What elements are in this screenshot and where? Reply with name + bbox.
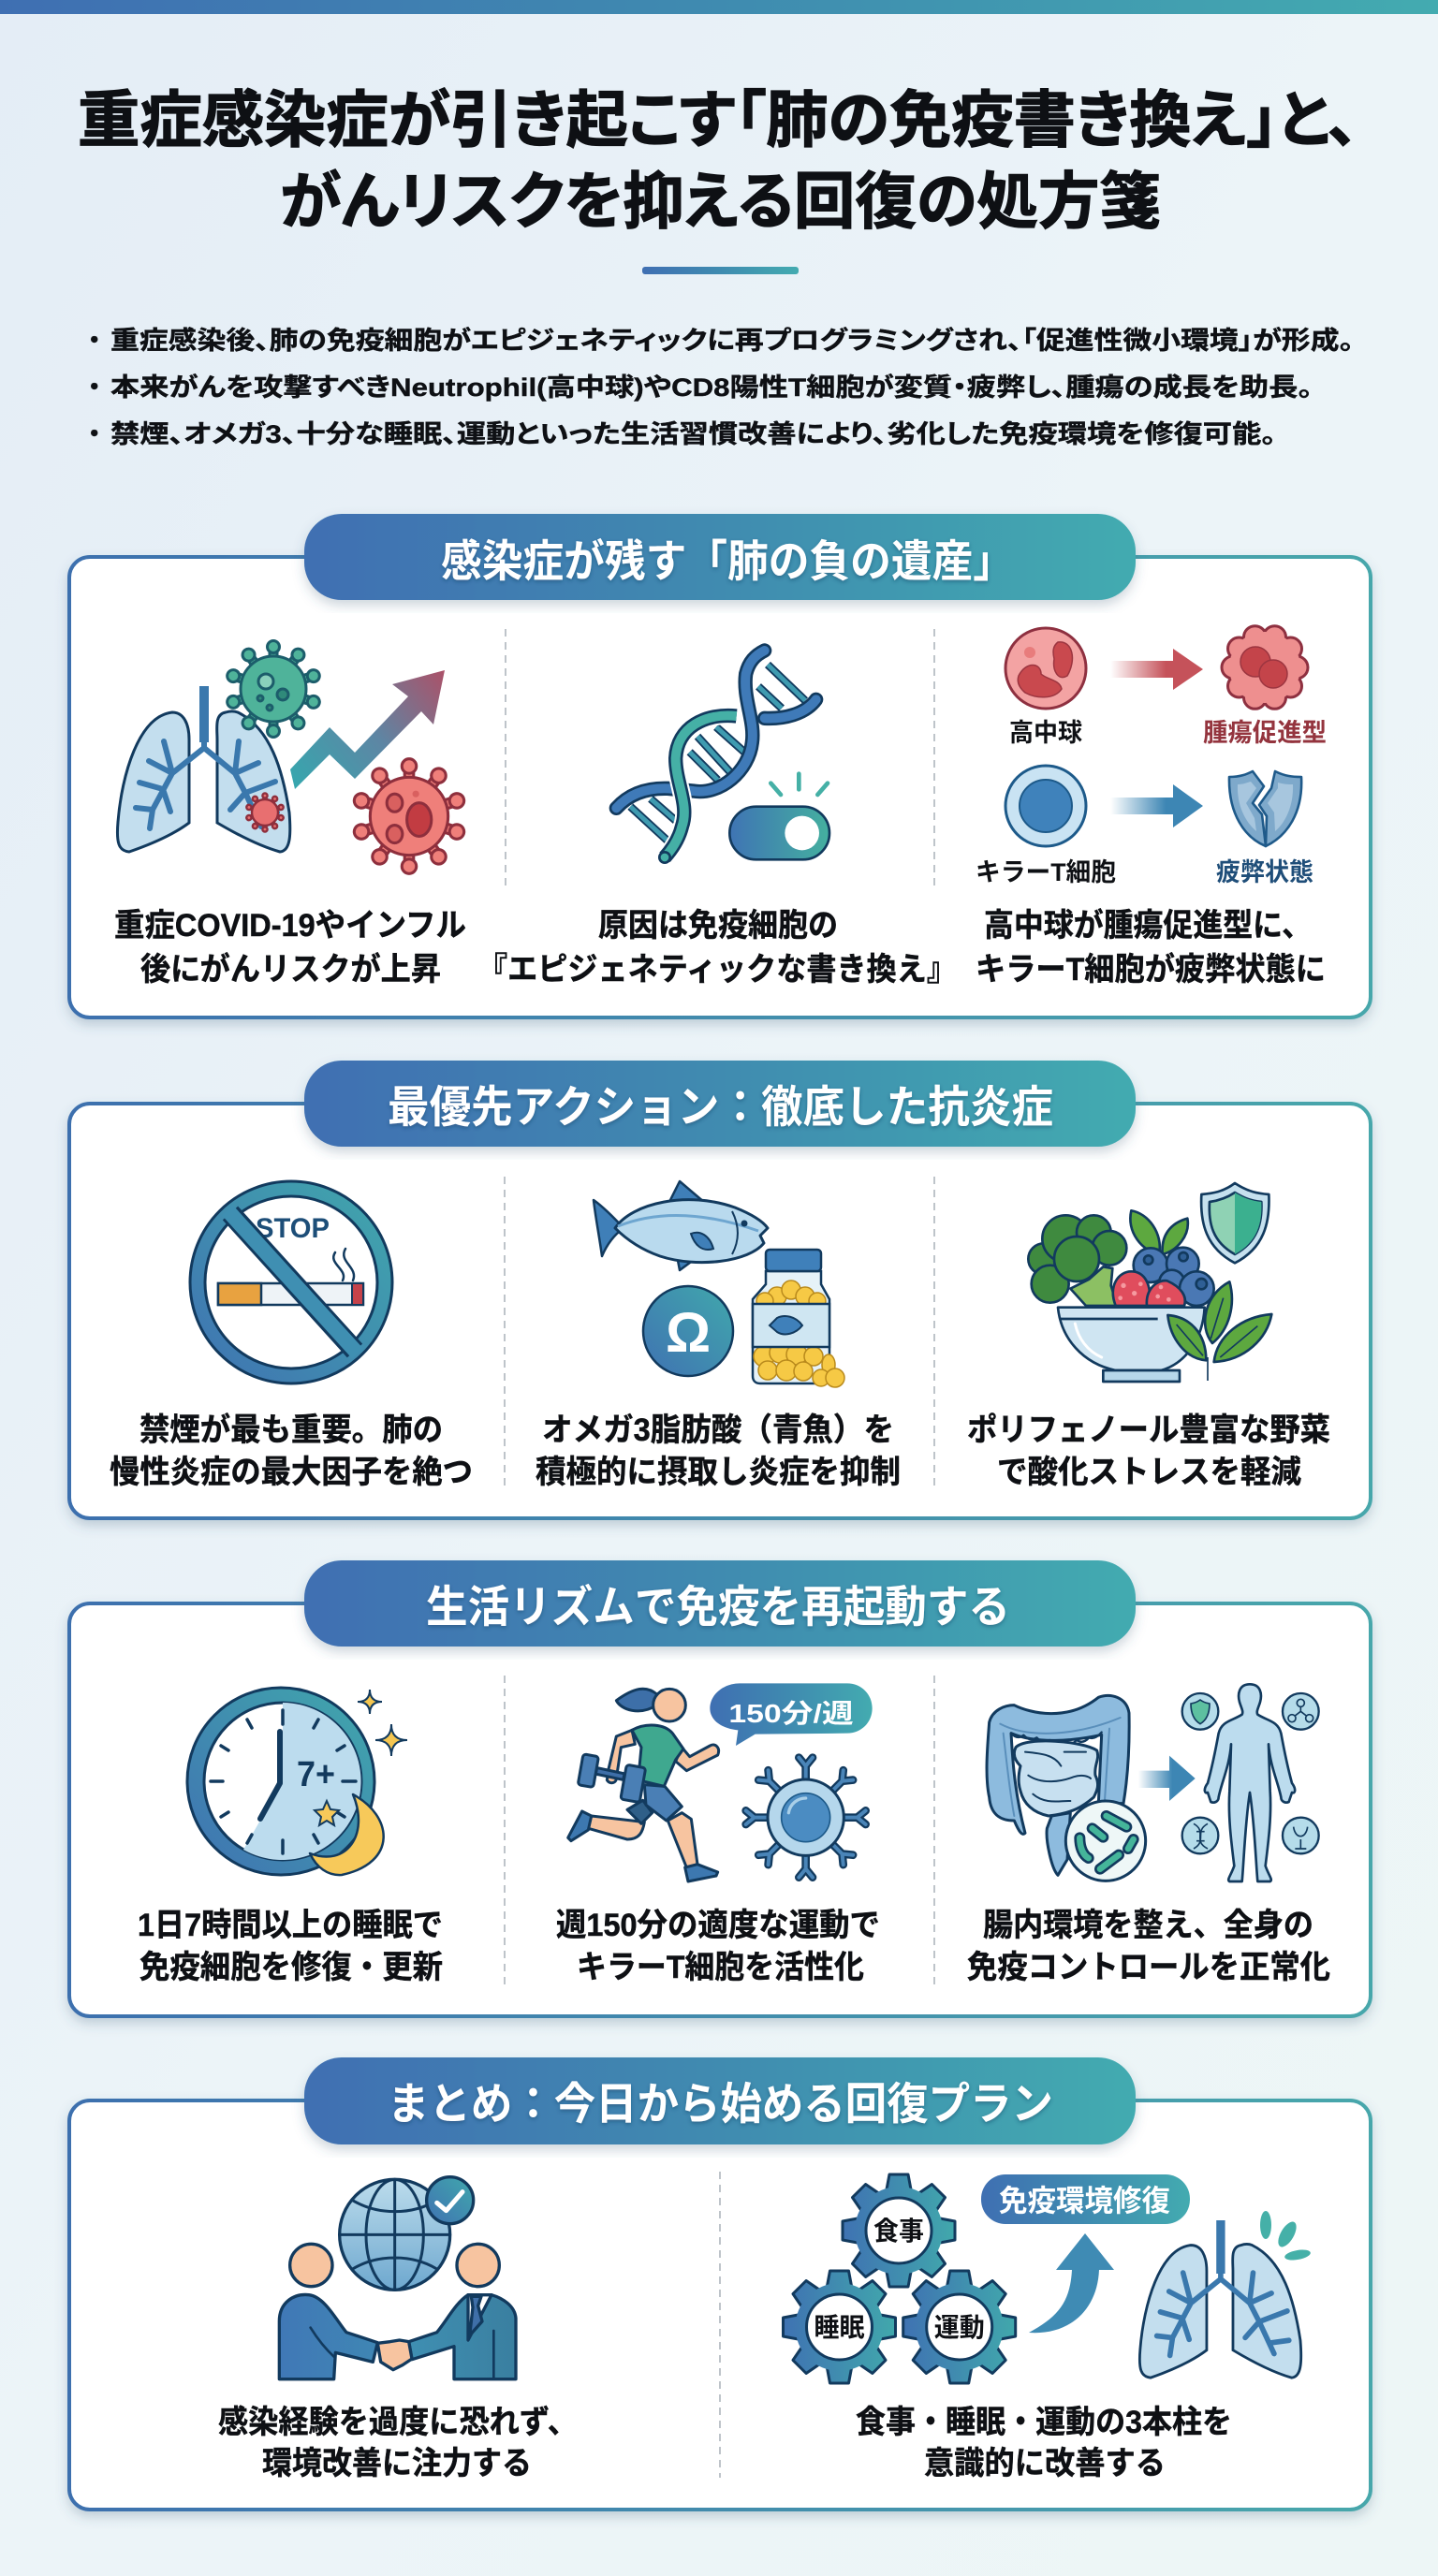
- caption: no smoking: [110, 1412, 473, 1490]
- icon: fish, omega and capsules: Ω: [666, 1301, 711, 1364]
- section heading pill: 感染症が残す「肺の負の遺産」: [441, 536, 1014, 586]
- caption: cell changes: 高中球が腫瘍促進型に、: [984, 907, 1312, 944]
- caption: no smoking: 禁煙が最も重要。肺の: [139, 1412, 443, 1448]
- icon: three gears: 食事: [873, 2217, 924, 2246]
- badge: 免疫環境修復: 免疫環境修復: [999, 2184, 1170, 2217]
- icon: three gears: 運動: [934, 2313, 985, 2342]
- icon: three gears: [783, 2174, 1016, 2383]
- section heading pill: [304, 1560, 1136, 1647]
- icon: runner, 150 min bubble and T cell: 150分/週: [728, 1699, 854, 1728]
- icon: no smoking: [190, 1181, 392, 1383]
- icon: healthy lungs: [1139, 2211, 1312, 2378]
- caption: don't fear: [218, 2405, 578, 2481]
- caption: gut: 免疫コントロールを正常化: [967, 1950, 1330, 1985]
- caption: epigenetic: 『エピジェネティックな書き換え』: [477, 952, 957, 988]
- caption: epigenetic: [477, 908, 957, 988]
- caption: sleep: [138, 1908, 443, 1985]
- caption: don't fear: 感染経験を過度に恐れず、: [218, 2405, 578, 2440]
- section heading pill: [304, 1061, 1136, 1147]
- caption: polyphenol: ポリフェノール豊富な野菜: [967, 1412, 1330, 1448]
- section heading pill: [304, 2057, 1136, 2144]
- caption: omega 3: [536, 1412, 901, 1490]
- caption: sleep: 1日7時間以上の睡眠で: [138, 1908, 443, 1943]
- title: がんリスクを抑える回復の処方箋: [280, 167, 1161, 236]
- caption: no smoking: 慢性炎症の最大因子を絶つ: [110, 1455, 473, 1490]
- caption: polyphenol: [967, 1412, 1330, 1490]
- summary bullets: ・: [88, 420, 101, 448]
- icon: runner, 150 min bubble and T cell: [568, 1683, 873, 1881]
- icon: killer T cell to exhausted: 疲弊状態: [1216, 858, 1313, 886]
- summary bullets: 本来がんを攻撃すべきNeutrophil(高中球)やCD8陽性T細胞が変質・疲弊し、腫瘍の成長を助長。: [110, 373, 1313, 402]
- icon: neutrophil to tumor-promoting: 高中球: [1009, 719, 1082, 747]
- summary bullets: 禁煙、オメガ3、十分な睡眠、運動といった生活習慣改善により、劣化した免疫環境を修復可能。: [110, 420, 1276, 448]
- panel: 肺の負の遺産: [69, 514, 1371, 1017]
- caption: cell changes: キラーT細胞が疲弊状態に: [976, 951, 1326, 988]
- caption: sleep: 免疫細胞を修復・更新: [139, 1950, 443, 1985]
- caption: exercise: キラーT細胞を活性化: [577, 1950, 864, 1985]
- icon: handshake and globe: [279, 2177, 516, 2379]
- icon: lungs with viruses and rising arrow: [117, 640, 466, 873]
- summary bullets: 重症感染後、肺の免疫細胞がエピジェネティックに再プログラミングされ、「促進性微小環境」が形成。: [110, 326, 1354, 355]
- caption: don't fear: 環境改善に注力する: [262, 2446, 532, 2481]
- icon: neutrophil to tumor-promoting: [1005, 626, 1327, 747]
- caption: three pillars: 意識的に改善する: [924, 2446, 1166, 2481]
- caption: three pillars: 食事・睡眠・運動の3本柱を: [856, 2405, 1232, 2440]
- icon: clock with moon: 7+: [297, 1755, 335, 1794]
- caption: omega 3: 積極的に摂取し炎症を抑制: [536, 1455, 901, 1490]
- summary bullets: ・: [88, 373, 101, 402]
- section heading pill: 最優先アクション：徹底した抗炎症: [388, 1082, 1053, 1132]
- caption: polyphenol: で酸化ストレスを軽減: [997, 1455, 1301, 1490]
- icon: fish, omega and capsules: [594, 1181, 844, 1387]
- top gradient bar: [0, 0, 1438, 14]
- caption: epigenetic: 原因は免疫細胞の: [598, 908, 838, 944]
- title: 重症感染症が引き起こす「肺の免疫書き換え」と、: [78, 85, 1358, 154]
- icon: DNA helix with switch: [616, 651, 829, 863]
- icon: vegetable bowl and shield: [1028, 1183, 1271, 1382]
- title underline: [642, 267, 799, 274]
- caption: gut: 腸内環境を整え、全身の: [983, 1908, 1313, 1943]
- icon: neutrophil to tumor-promoting: 腫瘍促進型: [1203, 719, 1327, 747]
- section heading pill: まとめ：今日から始める回復プラン: [388, 2079, 1053, 2129]
- section heading pill: 生活リズムで免疫を再起動する: [426, 1582, 1010, 1632]
- icon: three gears: 睡眠: [814, 2313, 865, 2342]
- panel: まとめ: [69, 2057, 1371, 2510]
- section heading pill: [304, 514, 1136, 600]
- summary bullets: [88, 326, 1354, 448]
- arrow: curved up: [1029, 2233, 1114, 2333]
- caption: three pillars: [856, 2405, 1232, 2481]
- panel: 徹底した抗炎症: [69, 1061, 1371, 1518]
- badge: 免疫環境修復: [981, 2174, 1190, 2224]
- icon: killer T cell to exhausted: キラーT細胞: [976, 858, 1116, 886]
- caption: cell changes: [976, 907, 1326, 988]
- caption: exercise: [556, 1908, 880, 1985]
- caption: risk: 後にがんリスクが上昇: [140, 951, 441, 988]
- icon: killer T cell to exhausted: [976, 766, 1313, 886]
- icon: no smoking: STOP: [256, 1213, 330, 1244]
- icon: clock with moon: [187, 1688, 407, 1875]
- caption: gut: [967, 1908, 1330, 1985]
- title: [78, 85, 1358, 236]
- panel: 生活リズム: [69, 1560, 1371, 2016]
- icon: gut microbiome and body: [987, 1684, 1319, 1881]
- summary bullets: ・: [88, 327, 101, 355]
- caption: risk: [114, 908, 466, 988]
- caption: risk: 重症COVID-19やインフル: [114, 908, 466, 944]
- caption: exercise: 週150分の適度な運動で: [556, 1908, 880, 1943]
- caption: omega 3: オメガ3脂肪酸（青魚）を: [542, 1412, 894, 1448]
